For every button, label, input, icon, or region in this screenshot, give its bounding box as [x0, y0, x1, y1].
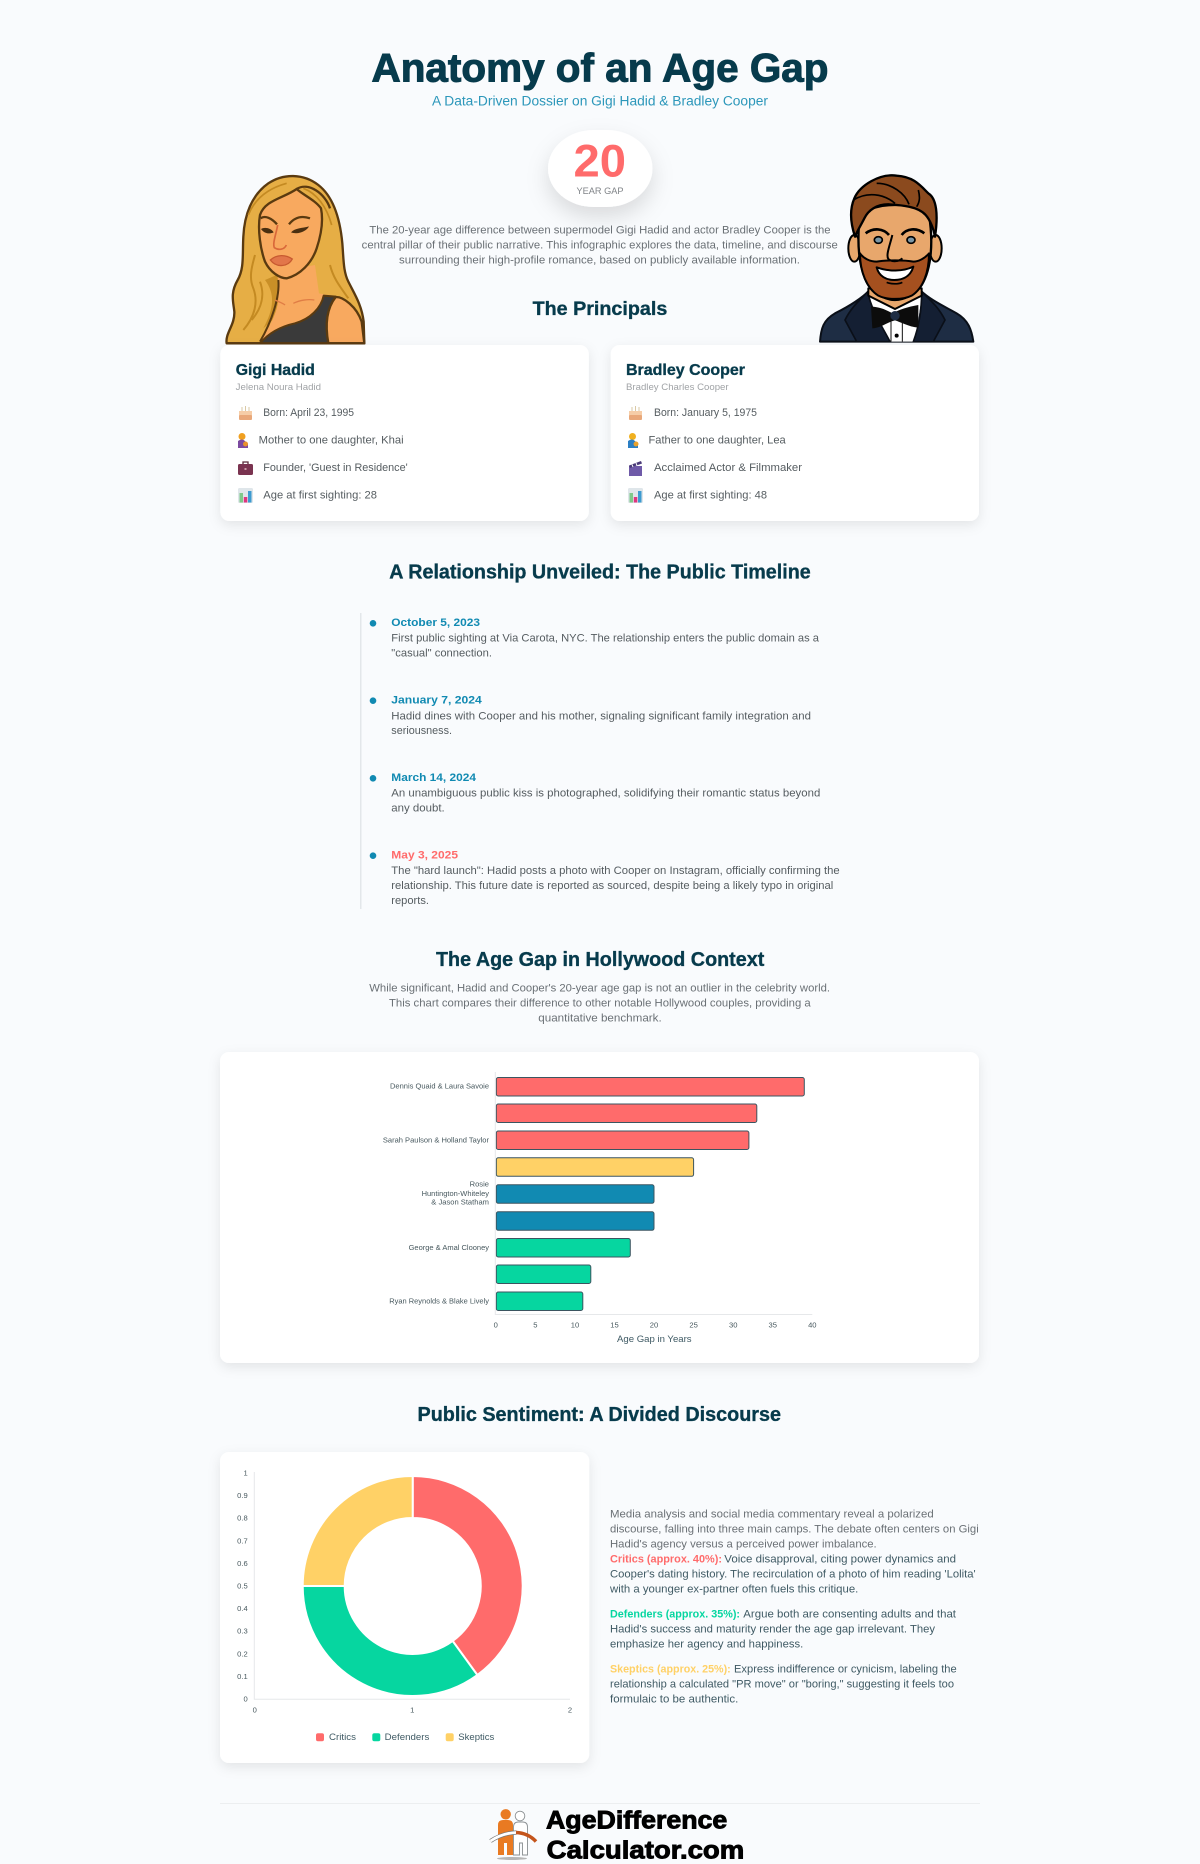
intro paragraph: discourse, falling into three main camps. The debate often centers on Gigi	[610, 1524, 979, 1536]
fact: father: Father to one daughter, Lea	[648, 434, 786, 446]
event: May 3, 2025: relationship. This future date is reported as sourced, despite being a likely typo in original	[391, 880, 833, 892]
defenders paragraph: Defenders (approx. 35%):	[610, 1609, 740, 1621]
heading: The Principals: The Principals	[533, 299, 667, 320]
fact: mother	[238, 433, 404, 448]
intro paragraph: Hadid's agency versus a perceived power imbalance.	[610, 1539, 877, 1551]
skeptics paragraph: formulaic to be authentic.	[610, 1694, 738, 1706]
fact: age: Age at first sighting: 48	[654, 489, 767, 501]
illustration: Gigi Hadid	[226, 176, 364, 343]
y axis ticks: 0.5	[237, 1582, 248, 1590]
event: May 3, 2025	[370, 850, 840, 907]
event: October 5, 2023: First public sighting at Via Carota, NYC. The relationship enters the public domain as a	[391, 633, 819, 645]
x axis ticks: 35	[768, 1321, 777, 1330]
context paragraph	[369, 983, 830, 1025]
fact: age: Age at first sighting: 28	[263, 489, 377, 501]
heading: Hollywood context: The Age Gap in Hollywood Context	[436, 949, 765, 971]
context paragraph: quantitative benchmark.	[538, 1013, 662, 1025]
y axis ticks: 0.6	[237, 1559, 248, 1568]
x axis ticks: 25	[689, 1321, 698, 1330]
x axis ticks	[253, 1705, 572, 1714]
event: March 14, 2024: any doubt.	[391, 803, 445, 815]
critics paragraph: Critics (approx. 40%):	[610, 1554, 722, 1566]
event: January 7, 2024: Hadid dines with Cooper and his mother, signaling significant family integration and	[391, 710, 811, 722]
critics paragraph	[609, 1554, 976, 1596]
event: October 5, 2023: "casual" connection.	[391, 648, 492, 660]
panel: Gigi Hadid card	[220, 345, 589, 521]
badge: 20 year gap	[548, 130, 652, 207]
x axis ticks: 40	[808, 1321, 817, 1330]
fact: born	[239, 406, 354, 420]
skeptics paragraph	[610, 1664, 957, 1706]
defenders paragraph: Argue both are consenting adults and that	[743, 1609, 956, 1621]
fact: career	[629, 461, 803, 476]
heading: public sentiment: Public Sentiment: A Divided Discourse	[418, 1404, 781, 1426]
x axis ticks: 5	[533, 1321, 538, 1330]
intro text	[362, 224, 838, 266]
couple labels: Ryan Reynolds & Blake Lively	[389, 1296, 489, 1305]
skeptics paragraph: Skeptics (approx. 25%):	[610, 1664, 731, 1676]
card name: Bradley Cooper: Bradley Charles Cooper	[626, 382, 729, 392]
card name: Gigi Hadid	[236, 362, 321, 392]
event: May 3, 2025: The "hard launch": Hadid posts a photo with Cooper on Instagram, officially confirming the	[391, 865, 840, 877]
legend	[316, 1732, 495, 1742]
event: March 14, 2024: An unambiguous public kiss is photographed, solidifying their romantic status beyond	[391, 788, 820, 800]
panel: bar chart	[220, 1052, 979, 1363]
fact: born: Born: April 23, 1995	[263, 407, 354, 419]
skeptics paragraph: Express indifference or cynicism, labeling the	[734, 1664, 957, 1676]
skeptics paragraph: relationship a calculated "PR move" or "boring," suggesting it feels too	[610, 1679, 954, 1691]
couple labels	[383, 1082, 489, 1305]
y axis ticks: 0.7	[237, 1536, 248, 1545]
x axis ticks: 10	[571, 1321, 579, 1330]
critics paragraph: Voice disapproval, citing power dynamics and	[724, 1554, 956, 1566]
donut	[303, 1476, 523, 1696]
badge: 20 year gap: YEAR GAP	[576, 186, 624, 196]
defenders paragraph: Hadid's success and maturity render the age gap irrelevant. They	[610, 1624, 936, 1636]
fact: born: Born: January 5, 1975	[654, 407, 757, 419]
subtitle: A Data-Driven Dossier on Gigi Hadid & Bradley Cooper	[432, 94, 768, 110]
x axis ticks: 30	[729, 1321, 737, 1330]
x axis ticks	[494, 1321, 817, 1330]
couple labels: Rosie	[470, 1180, 489, 1189]
logo text: AgeDifference	[546, 1806, 727, 1834]
event: March 14, 2024	[370, 772, 820, 815]
event: January 7, 2024	[370, 694, 811, 737]
icon: two people with arc	[490, 1809, 536, 1860]
couple labels: Dennis Quaid & Laura Savoie	[390, 1082, 489, 1091]
context paragraph: While significant, Hadid and Cooper's 20-year age gap is not an outlier in the celebrity world.	[369, 983, 830, 995]
legend: Critics	[329, 1732, 356, 1742]
card name: Gigi Hadid: Jelena Noura Hadid	[236, 382, 321, 392]
event: May 3, 2025: May 3, 2025	[391, 850, 458, 862]
y axis ticks: 0	[243, 1694, 248, 1704]
y axis ticks: 1	[243, 1468, 248, 1478]
context paragraph: This chart compares their difference to other notable Hollywood couples, providing a	[389, 998, 811, 1010]
y axis ticks: 0.9	[237, 1491, 248, 1500]
badge: 20 year gap: 20	[574, 136, 626, 187]
intro text: central pillar of their public narrative. This infographic explores the data, timeline, and discourse	[362, 239, 838, 251]
fact: born	[629, 406, 757, 420]
event: May 3, 2025: reports.	[391, 895, 429, 907]
y axis ticks: 0.8	[237, 1514, 248, 1523]
event: October 5, 2023	[370, 617, 819, 660]
defenders paragraph: emphasize her agency and happiness.	[610, 1639, 803, 1651]
fact: mother: Mother to one daughter, Khai	[259, 434, 404, 446]
x axis ticks: 2	[568, 1705, 572, 1714]
x axis ticks: 20	[650, 1321, 658, 1330]
sentiment text	[609, 1509, 979, 1706]
y axis ticks: 0.4	[237, 1604, 248, 1613]
y axis ticks	[237, 1468, 248, 1704]
couple labels: Sarah Paulson & Holland Taylor	[383, 1135, 489, 1144]
x axis ticks: 0	[253, 1705, 257, 1714]
x axis title: Age Gap in Years	[617, 1334, 692, 1344]
couple labels: Huntington-Whiteley	[422, 1189, 489, 1198]
title: Anatomy of an Age Gap	[372, 47, 828, 91]
intro paragraph: Media analysis and social media commentary reveal a polarized	[610, 1509, 934, 1521]
fact: age	[238, 488, 377, 503]
critics paragraph: with a younger ex-partner often fuels this critique.	[609, 1584, 858, 1596]
panel: Bradley Cooper card	[611, 345, 979, 521]
event: January 7, 2024: January 7, 2024	[391, 694, 483, 706]
card name: Bradley Cooper	[626, 362, 745, 392]
axis lines	[495, 1072, 812, 1314]
legend: Defenders	[385, 1732, 430, 1742]
legend: Skeptics	[458, 1732, 495, 1742]
defenders paragraph	[610, 1609, 956, 1651]
intro paragraph	[610, 1509, 979, 1551]
intro text: The 20-year age difference between supermodel Gigi Hadid and actor Bradley Cooper is the	[369, 224, 831, 236]
event: October 5, 2023: October 5, 2023	[391, 617, 480, 629]
y axis ticks: 0.3	[237, 1627, 248, 1636]
intro text: surrounding their high-profile romance, based on publicly available information.	[399, 254, 800, 266]
heading: timeline: A Relationship Unveiled: The Public Timeline	[389, 561, 811, 583]
y axis ticks: 0.1	[237, 1672, 248, 1681]
critics paragraph: Cooper's dating history. The recirculation of a photo of him reading 'Lolita'	[610, 1569, 976, 1581]
axes	[254, 1472, 570, 1699]
fact: founder: Founder, 'Guest in Residence'	[263, 462, 408, 474]
logo text: Calculator.com	[547, 1836, 744, 1864]
couple labels: George & Amal Clooney	[409, 1243, 489, 1252]
illustration: Bradley Cooper	[820, 175, 973, 342]
event: January 7, 2024: seriousness.	[391, 725, 452, 737]
event: March 14, 2024: March 14, 2024	[391, 772, 477, 784]
x axis ticks: 0	[494, 1321, 498, 1330]
x axis ticks: 1	[410, 1705, 414, 1714]
timeline	[360, 613, 840, 909]
fact: career: Acclaimed Actor & Filmmaker	[654, 462, 803, 474]
footer logo	[490, 1806, 744, 1864]
bars	[496, 1078, 804, 1310]
y axis ticks: 0.2	[237, 1649, 248, 1658]
card name: Gigi Hadid: Gigi Hadid	[236, 362, 315, 379]
fact: age	[628, 488, 767, 503]
logo text	[546, 1806, 744, 1864]
card name: Bradley Cooper: Bradley Cooper	[626, 362, 745, 379]
couple labels: & Jason Statham	[431, 1198, 489, 1207]
x axis ticks: 15	[610, 1321, 619, 1330]
fact: father	[628, 433, 786, 448]
panel: donut chart	[220, 1452, 589, 1763]
